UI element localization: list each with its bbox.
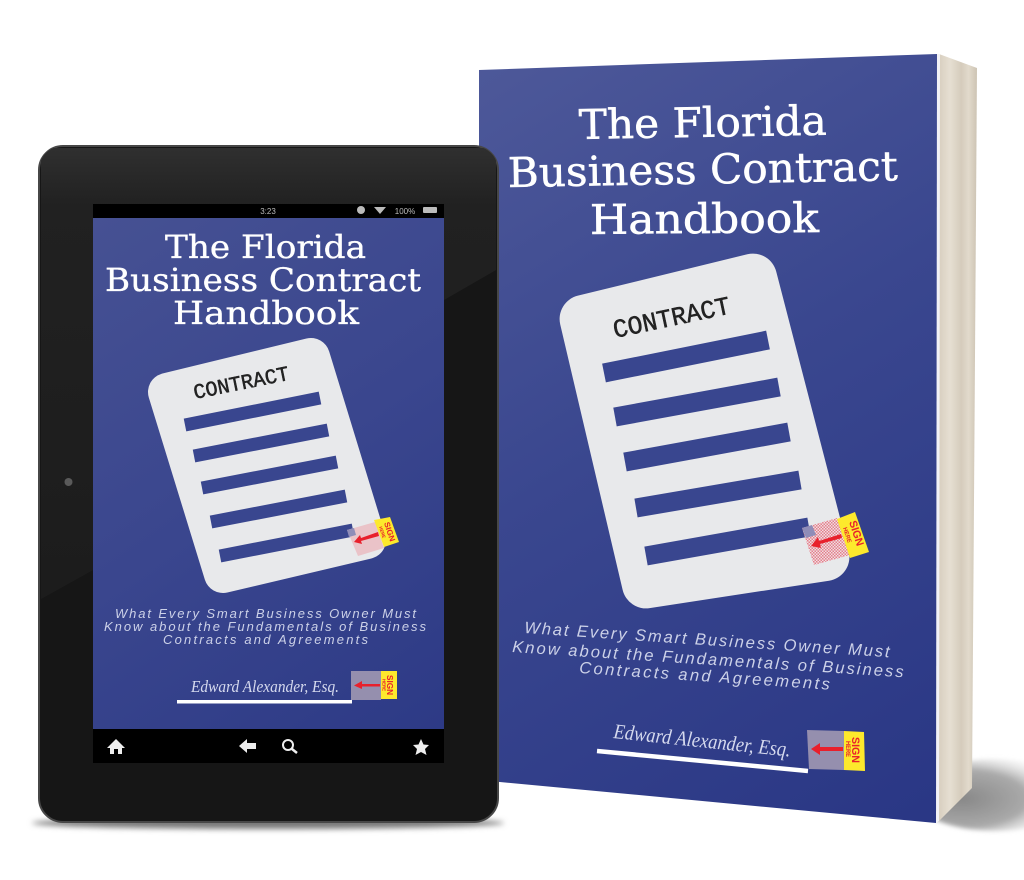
status battery icon (423, 207, 437, 213)
tablet bezel reflection (41, 148, 496, 442)
book contract heading: CONTRACT (610, 292, 733, 346)
book sign here sticker (802, 512, 869, 565)
book page block (938, 54, 977, 822)
book author sign here sticker: SIGN (849, 737, 861, 763)
book cast shadow (913, 759, 1024, 831)
tablet contract lines (185, 398, 353, 556)
book subtitle: What Every Smart Business Owner Must (524, 619, 892, 661)
book subtitle: Know about the Fundamentals of Business (512, 638, 904, 681)
tablet contract heading: CONTRACT (192, 364, 291, 406)
book subtitle: Contracts and Agreements (579, 659, 830, 694)
book sign here sticker: SIGN (846, 519, 866, 548)
tablet screen cover (93, 218, 444, 729)
book author underline (597, 751, 808, 771)
tablet shadow (32, 817, 504, 829)
tablet sign here sticker: HERE (378, 526, 387, 539)
book subtitle (512, 619, 904, 694)
tablet cover sign here sticker (351, 671, 397, 700)
icon: search (283, 740, 297, 753)
tablet cover title (105, 228, 421, 332)
tablet cover title: Handbook (173, 294, 360, 332)
tablet cover title: The Florida (165, 228, 366, 266)
tablet camera (64, 478, 72, 486)
status wifi icon (374, 207, 386, 214)
book title: Handbook (590, 194, 820, 244)
icon: star (413, 739, 429, 755)
tablet sign here sticker (347, 517, 399, 556)
status time: 3:23 (260, 207, 276, 216)
book author sign here sticker: HERE (844, 741, 850, 757)
tablet sign here sticker: SIGN (382, 521, 397, 543)
book title: The Florida (578, 97, 827, 149)
book title: Business Contract (507, 142, 899, 197)
tablet: e-reader (32, 146, 504, 829)
status add icon (357, 206, 365, 214)
icon: home (107, 739, 125, 754)
icon: back arrow (239, 739, 256, 753)
tablet body (39, 146, 498, 822)
tablet cover subtitle (104, 606, 426, 647)
book spine edge (936, 54, 940, 823)
tablet cover subtitle: Contracts and Agreements (163, 632, 368, 647)
book author sign here sticker (807, 730, 865, 771)
book cover (479, 54, 937, 823)
tablet cover sign here sticker: SIGN (385, 675, 394, 695)
tablet screen status bar (93, 204, 444, 219)
tablet cover title: Business Contract (105, 261, 421, 299)
tablet cover sign here sticker: HERE (382, 679, 386, 691)
tablet navigation bar (93, 729, 444, 763)
book contract document (584, 278, 869, 584)
tablet contract document (167, 357, 399, 574)
book title (507, 97, 899, 244)
book: printed paperback (479, 54, 1024, 831)
status battery label: 100% (395, 207, 415, 216)
book author name: Edward Alexander, Esq. (612, 719, 792, 762)
tablet cover author underline (177, 700, 352, 704)
tablet cover subtitle: Know about the Fundamentals of Business (104, 619, 426, 634)
tablet cover author name: Edward Alexander, Esq. (190, 677, 339, 696)
book contract lines (604, 340, 809, 556)
tablet cover subtitle: What Every Smart Business Owner Must (115, 606, 417, 621)
book sign here sticker: HERE (841, 527, 852, 544)
